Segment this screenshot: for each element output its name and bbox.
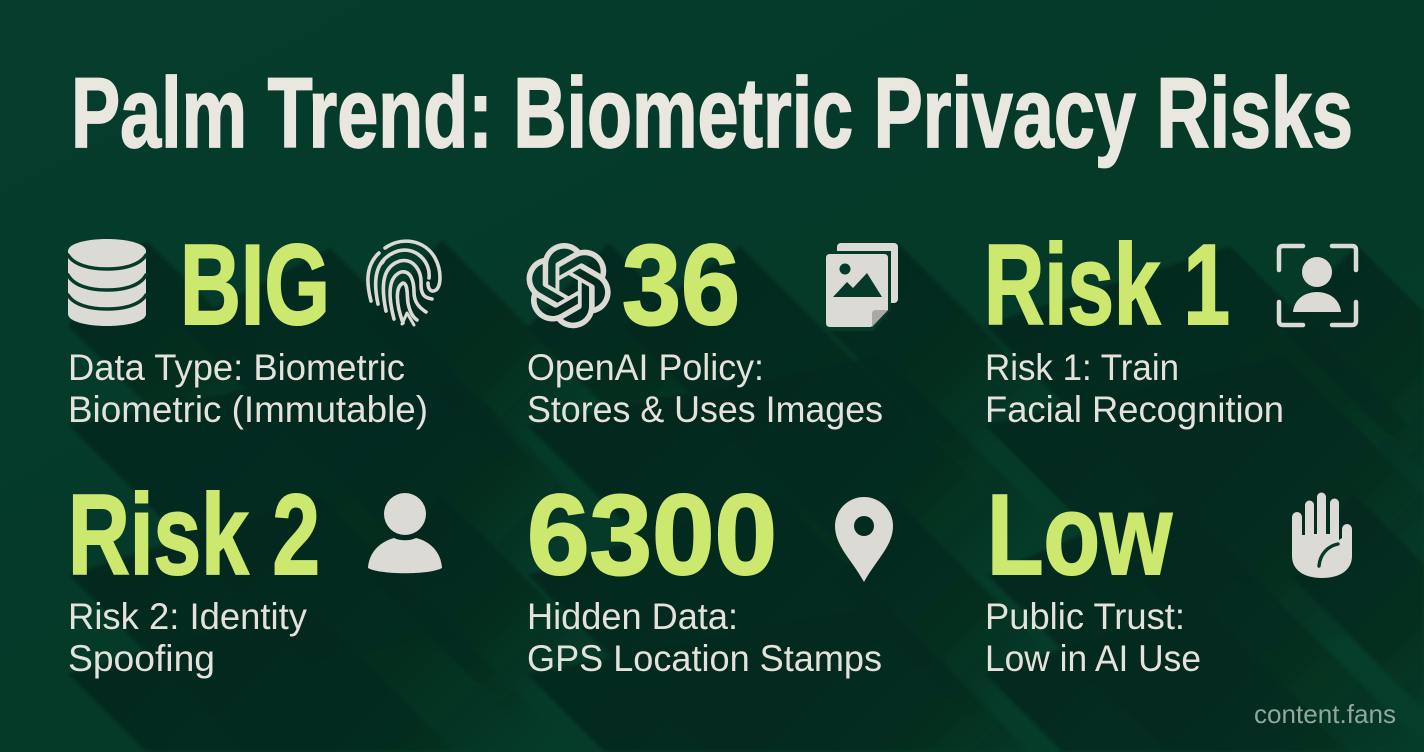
label: Public Trust: xyxy=(985,596,1185,637)
stat: Low: Low xyxy=(987,472,1172,599)
panel: hidden data xyxy=(527,472,893,679)
panel: OpenAI policy xyxy=(527,222,898,430)
watermark: content.fans xyxy=(1254,699,1396,729)
label: Risk 1: Train xyxy=(985,347,1179,388)
label: Risk 2: Identity xyxy=(68,596,307,637)
icon: raised hand xyxy=(1292,492,1352,578)
stat: Risk 1: Risk 1 xyxy=(984,222,1230,349)
icon: image stack xyxy=(826,243,898,331)
icon: face scan xyxy=(1279,246,1356,325)
panel: public trust xyxy=(985,472,1352,679)
label: OpenAI Policy: xyxy=(527,347,764,388)
stat: BIG: BIG xyxy=(180,222,330,349)
stat: 36: 36 xyxy=(622,222,740,349)
panel: risk 2 xyxy=(68,472,442,679)
panel: data type xyxy=(68,222,440,430)
icon: location pin xyxy=(835,497,893,582)
long diagonal shadows xyxy=(68,240,1424,752)
label: Hidden Data: xyxy=(527,596,738,637)
icon: OpenAI knot xyxy=(527,243,611,328)
label: Data Type: Biometric xyxy=(68,347,405,388)
label: Spoofing xyxy=(68,638,215,679)
stat: Risk 2: Risk 2 xyxy=(68,472,320,599)
label: Low in AI Use xyxy=(985,638,1201,679)
label: Facial Recognition xyxy=(985,389,1284,430)
label: Biometric (Immutable) xyxy=(68,389,428,430)
icon: database xyxy=(68,239,146,326)
stat: 6300: 6300 xyxy=(527,472,777,599)
icon: fingerprint xyxy=(368,241,440,325)
label: GPS Location Stamps xyxy=(527,638,882,679)
panel: risk 1 xyxy=(984,222,1356,430)
label: Stores & Uses Images xyxy=(527,389,883,430)
icon: person xyxy=(368,493,442,573)
